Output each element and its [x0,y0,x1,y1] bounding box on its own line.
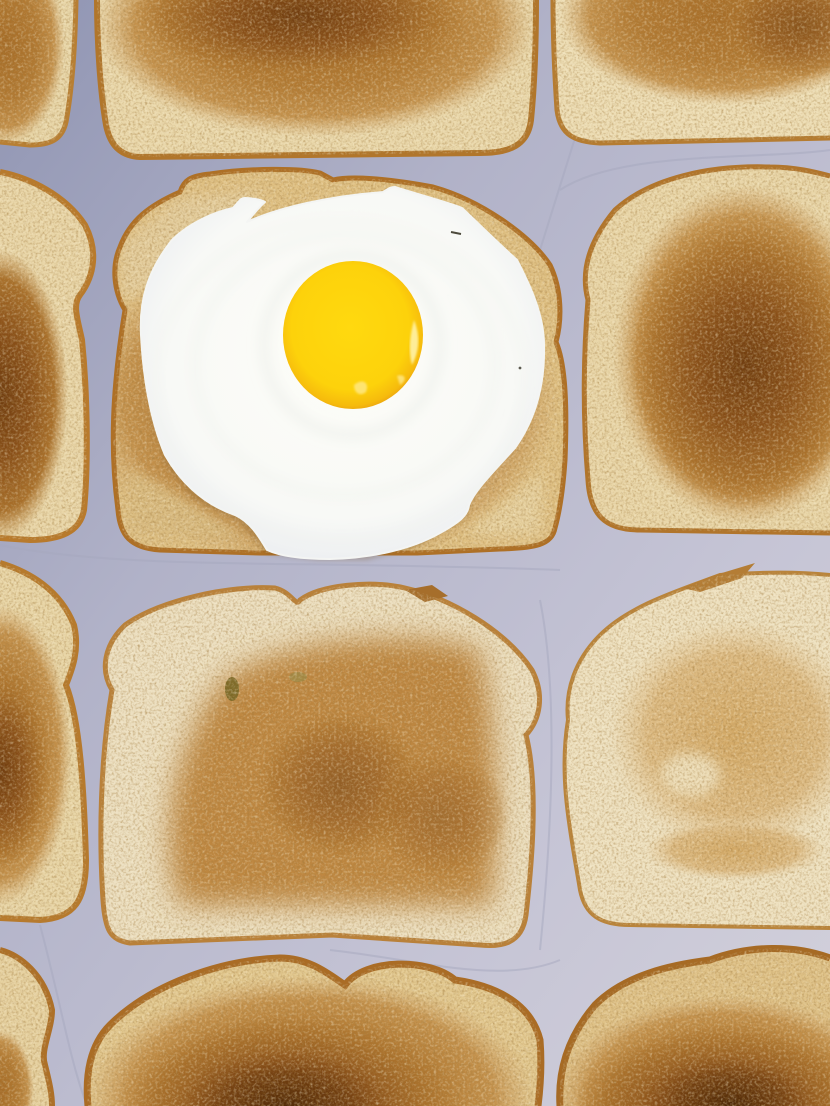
crust flake [405,585,448,602]
crust flake [682,563,755,592]
fried egg [141,187,544,560]
toast: lower right [562,563,830,928]
egg white folds [155,220,525,540]
toast: lower left [0,563,87,920]
egg shadow [150,415,470,560]
toast: bottom left [0,950,52,1106]
toast: middle right [583,167,830,533]
egg yolk [283,261,423,409]
egg specks [451,232,461,234]
toast: middle left [0,172,95,540]
toast: bottom right [560,948,830,1106]
toast: bottom centre [87,957,541,1106]
toast: under the egg [113,169,567,554]
toast: top right [553,0,830,143]
toast: lower centre [101,583,540,946]
toast: top left [0,0,76,145]
toast: top centre [97,0,536,157]
egg white [141,187,544,559]
